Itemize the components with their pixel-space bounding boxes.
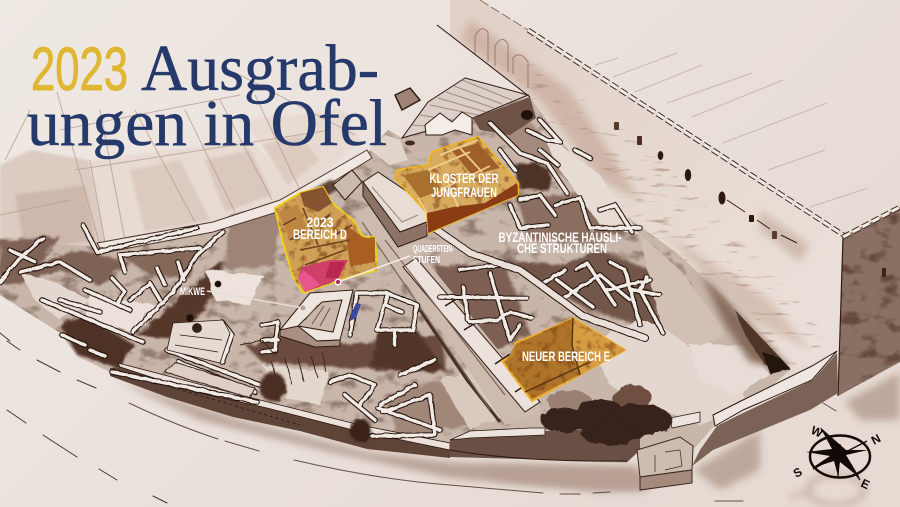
wall windows xyxy=(614,122,797,243)
title: 2023 xyxy=(31,35,128,103)
small front building xyxy=(637,437,693,490)
front retaining wall, right xyxy=(450,412,700,462)
road marks xyxy=(0,333,836,503)
orange area: Kloster der Jungfrauen xyxy=(395,137,518,233)
upper road edge xyxy=(97,150,372,253)
wall face xyxy=(450,0,845,370)
corner tower xyxy=(838,207,900,396)
label: 2023 Bereich D xyxy=(293,214,347,242)
label: Mikwe: MIKWE xyxy=(180,286,205,298)
label: Quaderstein-Stufen: STUFEN xyxy=(413,255,440,266)
small tree 2 xyxy=(350,420,372,442)
callout line: Mikwe xyxy=(207,291,306,311)
label: Neuer Bereich E: NEUER BEREICH E xyxy=(522,348,610,364)
large tree xyxy=(541,385,672,445)
middle stepped platform xyxy=(167,281,230,363)
outer wall at right xyxy=(692,351,838,466)
label: 2023 Bereich D: BEREICH D xyxy=(293,226,347,242)
label: Quaderstein-Stufen xyxy=(413,244,454,266)
shadow below front terrace wall xyxy=(115,380,650,492)
orange area: Neuer Bereich E xyxy=(502,318,625,401)
label: Kloster der Jungfrauen: KLOSTER DER xyxy=(430,170,498,186)
mikwe platform xyxy=(280,290,353,347)
excavation site base xyxy=(0,78,790,463)
compass: S xyxy=(791,465,804,481)
label: Quaderstein-Stufen: QUADERSTEIN- xyxy=(413,244,454,255)
label: 2023 Bereich D: 2023 xyxy=(306,214,334,230)
blue marker xyxy=(350,303,361,321)
label: Byzantinische häusliche Strukturen: CHE STRUKTUREN xyxy=(517,240,607,256)
ink texture xyxy=(0,78,700,440)
light zones xyxy=(20,130,770,430)
compass: W xyxy=(809,423,826,441)
wall top streaks xyxy=(595,53,868,207)
front retaining wall, left xyxy=(110,363,450,458)
orange area: Bereich D xyxy=(275,187,377,293)
label: Byzantinische häusliche Strukturen: BYZANTINISCHE HÄUSLI- xyxy=(498,229,622,245)
compass: E xyxy=(859,476,872,492)
compass xyxy=(791,423,883,492)
dark wedge at base of wall xyxy=(700,272,790,374)
cascading wall remains xyxy=(165,340,326,398)
faded street grid, upper left xyxy=(0,75,360,262)
pink dig zone xyxy=(298,260,348,292)
wash around front building xyxy=(483,372,900,490)
title: ungen in Ofel xyxy=(27,87,387,160)
title: Ausgrab- xyxy=(141,32,379,105)
title xyxy=(27,32,387,160)
compass: N xyxy=(869,431,883,448)
callout line: Quaderstein xyxy=(335,256,410,285)
excavated wall network xyxy=(0,120,663,436)
label: Kloster der Jungfrauen xyxy=(430,170,498,200)
icon: wall arches xyxy=(475,29,528,88)
washes of shadow xyxy=(0,122,660,440)
central causeway xyxy=(355,205,540,425)
label: Byzantinische häusliche Strukturen xyxy=(498,229,622,256)
compass shadow and washes xyxy=(790,475,864,505)
small tree 1 xyxy=(260,372,286,402)
upper building with striped roof xyxy=(370,25,536,165)
central block building xyxy=(333,170,427,247)
wall crenellated top edge xyxy=(480,0,845,236)
label: Kloster der Jungfrauen: JUNGFRAUEN xyxy=(431,184,497,200)
